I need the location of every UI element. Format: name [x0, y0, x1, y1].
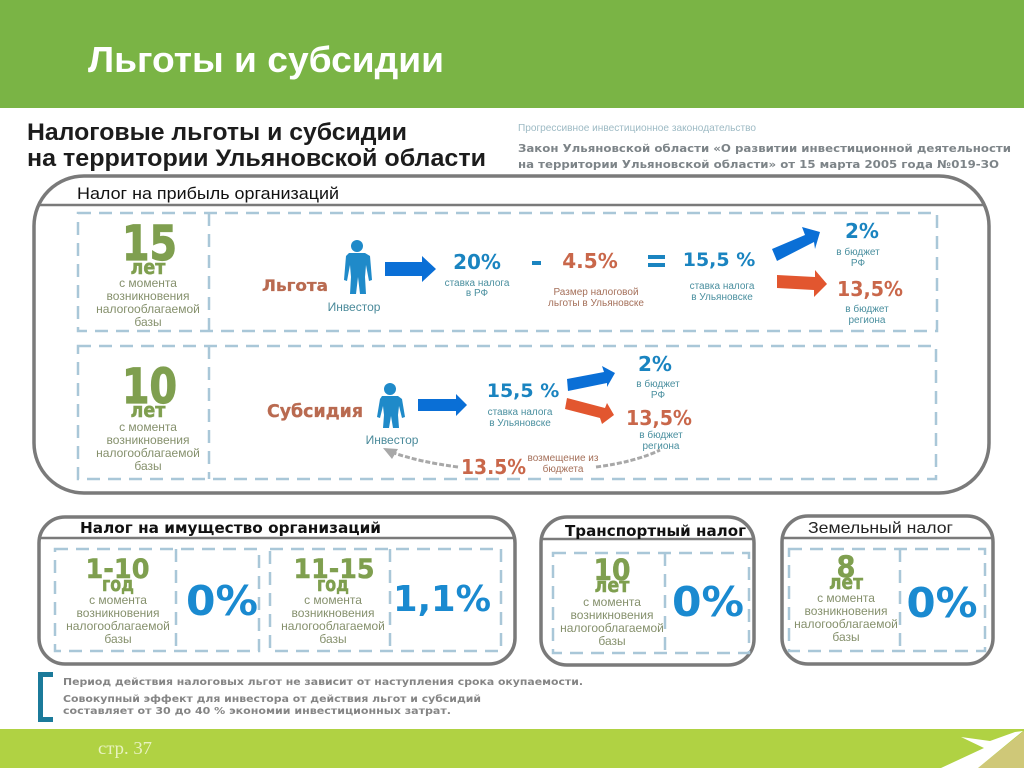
panel heading: Транспортный налог [565, 522, 746, 540]
regional 13,5%: 13,5% [837, 277, 903, 301]
rate 15,5%: в Ульяновске [691, 292, 753, 303]
federal 2% [636, 352, 680, 401]
panel heading: Налог на прибыль организаций [77, 184, 339, 203]
subtitle [27, 119, 486, 172]
logo [941, 731, 1024, 768]
term box 8 years [789, 549, 985, 651]
panel: profit tax [34, 176, 989, 493]
federal 2%: РФ [651, 390, 665, 401]
arrow: to regional budget [777, 270, 827, 297]
regional 13,5%: региона [848, 315, 886, 326]
term box 11-15: возникновения [292, 606, 374, 620]
term 10 years: лет [130, 398, 166, 422]
term box 10 years: лет [594, 573, 630, 597]
term 15 years: базы [134, 315, 162, 329]
term 10 years: с момента [119, 420, 177, 434]
term 15 years: с момента [119, 276, 177, 290]
term box 8 years: базы [832, 630, 860, 644]
term box 1-10: базы [104, 632, 132, 646]
term box 1-10: возникновения [77, 606, 159, 620]
term 10 years [96, 359, 200, 473]
regional 13,5% [626, 406, 692, 452]
term box 11-15: налогооблагаемой [281, 619, 385, 633]
regional 13,5%: 13,5% [626, 406, 692, 430]
rate 20%: 20% [453, 250, 501, 274]
panel: land tax [782, 516, 993, 664]
title: Льготы и субсидии [88, 39, 444, 80]
caption: investor: Инвестор [366, 433, 419, 447]
term box 10 years: с момента [583, 595, 641, 609]
panel: property tax [39, 517, 515, 664]
rate 20%: в РФ [466, 288, 489, 299]
law reference: Прогрессивное инвестиционное законодательство [518, 122, 756, 134]
term box 11-15: 11-15 [294, 554, 374, 585]
rate 0%: 0% [186, 577, 258, 625]
term 15 years: 15 [122, 216, 177, 272]
rate 0%: 0% [672, 578, 744, 626]
federal 2%: РФ [851, 258, 865, 269]
term box 1-10: налогооблагаемой [66, 619, 170, 633]
reimbursement 13.5%: 13.5% [461, 455, 526, 479]
federal 2% [836, 219, 880, 269]
caption: investor: Инвестор [328, 300, 381, 314]
minus sign [532, 261, 541, 265]
header banner [0, 0, 1024, 108]
arrow: reimbursement to investor [383, 448, 660, 467]
term box 1-10: с момента [89, 593, 147, 607]
rate 20%: ставка налога [445, 278, 510, 289]
term box 8 years: 8 [836, 550, 856, 584]
panel heading: Земельный налог [808, 520, 953, 537]
term box 11-15: год [317, 572, 349, 596]
term box 1-10 [55, 549, 259, 651]
footnote: составляет от 30 до 40 % экономии инвестиционных затрат. [63, 706, 451, 717]
term 15 years [96, 216, 200, 329]
term box 8 years: с момента [817, 591, 875, 605]
regional 13,5%: в бюджет [845, 303, 889, 315]
row 2: subsidy [78, 346, 936, 479]
arrow: to 20% [385, 256, 436, 282]
term box 11-15: базы [319, 632, 347, 646]
term box 11-15 [270, 549, 501, 651]
term box 8 years: лет [829, 570, 863, 594]
subtitle: Налоговые льготы и субсидии [27, 119, 407, 146]
icon: investor [344, 240, 372, 294]
federal 2%: 2% [845, 219, 879, 243]
law reference [518, 122, 1011, 171]
subtitle: на территории Ульяновской области [27, 145, 486, 172]
row 1: benefit [78, 213, 937, 331]
benefit 4.5% [548, 249, 644, 309]
icon: investor [377, 383, 405, 428]
panel heading: Налог на имущество организаций [80, 519, 381, 537]
term box 1-10: 1-10 [86, 554, 150, 585]
footnote: Совокупный эффект для инвестора от действия льгот и субсидий [63, 693, 481, 705]
rate 15,5% [683, 249, 755, 303]
panel: transport tax [541, 517, 754, 665]
rate 15,5%: 15,5 % [683, 249, 755, 271]
rate 0%: 0% [906, 579, 978, 627]
term box 10 years: возникновения [571, 608, 653, 622]
footnote: Период действия налоговых льгот не зависит от наступления срока окупаемости. [63, 677, 583, 688]
bracket [40, 674, 53, 720]
term 10 years: базы [134, 459, 162, 473]
term 15 years: налогооблагаемой [96, 302, 200, 316]
term box 10 years [553, 553, 749, 653]
term box 11-15: с момента [304, 593, 362, 607]
label: subsidy: Субсидия [267, 401, 363, 422]
regional 13,5%: региона [642, 441, 680, 452]
caption: reimbursement: возмещение из [528, 453, 599, 464]
law reference: Закон Ульяновской области «О развитии инвестиционной деятельности [518, 142, 1011, 155]
term 10 years: возникновения [107, 433, 189, 447]
rate 1,1%: 1,1% [393, 579, 491, 620]
federal 2%: 2% [638, 352, 672, 376]
equals sign [648, 255, 665, 267]
rate 15,5%: 15,5 % [487, 380, 559, 402]
term 15 years: возникновения [107, 289, 189, 303]
rate 15,5% [487, 380, 559, 429]
arrow: to federal budget [567, 366, 615, 391]
term box 1-10: год [102, 572, 134, 596]
term box 10 years: базы [598, 634, 626, 648]
caption: reimbursement: бюджета [543, 463, 584, 475]
rate 20% [445, 250, 510, 299]
term 10 years: налогооблагаемой [96, 446, 200, 460]
arrow: to regional budget [565, 398, 614, 424]
law reference: на территории Ульяновской области» от 15 марта 2005 года №019-ЗО [518, 158, 999, 171]
term box 8 years: возникновения [805, 604, 887, 618]
label: benefit: Льгота [262, 276, 328, 295]
federal 2%: в бюджет [636, 378, 680, 390]
rate 15,5%: ставка налога [488, 407, 553, 418]
arrow: to 15,5% [418, 394, 467, 416]
term 15 years: лет [130, 255, 166, 279]
page number: стр. 37 [98, 738, 152, 758]
rate 15,5%: ставка налога [690, 281, 755, 292]
footer bar [0, 729, 1024, 768]
benefit 4.5%: 4.5% [562, 249, 618, 273]
regional 13,5%: в бюджет [639, 429, 683, 441]
rate 15,5%: в Ульяновске [489, 418, 551, 429]
caption: reimbursement [528, 453, 599, 475]
benefit 4.5%: Размер налоговой [553, 287, 639, 298]
footnote [63, 677, 583, 717]
term box 8 years: налогооблагаемой [794, 617, 898, 631]
federal 2%: в бюджет [836, 246, 880, 258]
term 10 years: 10 [122, 359, 177, 415]
benefit 4.5%: льготы в Ульяновске [548, 298, 644, 309]
arrow: to federal budget [772, 227, 820, 261]
term box 10 years: 10 [594, 553, 630, 587]
regional 13,5% [837, 277, 903, 326]
term box 10 years: налогооблагаемой [560, 621, 664, 635]
